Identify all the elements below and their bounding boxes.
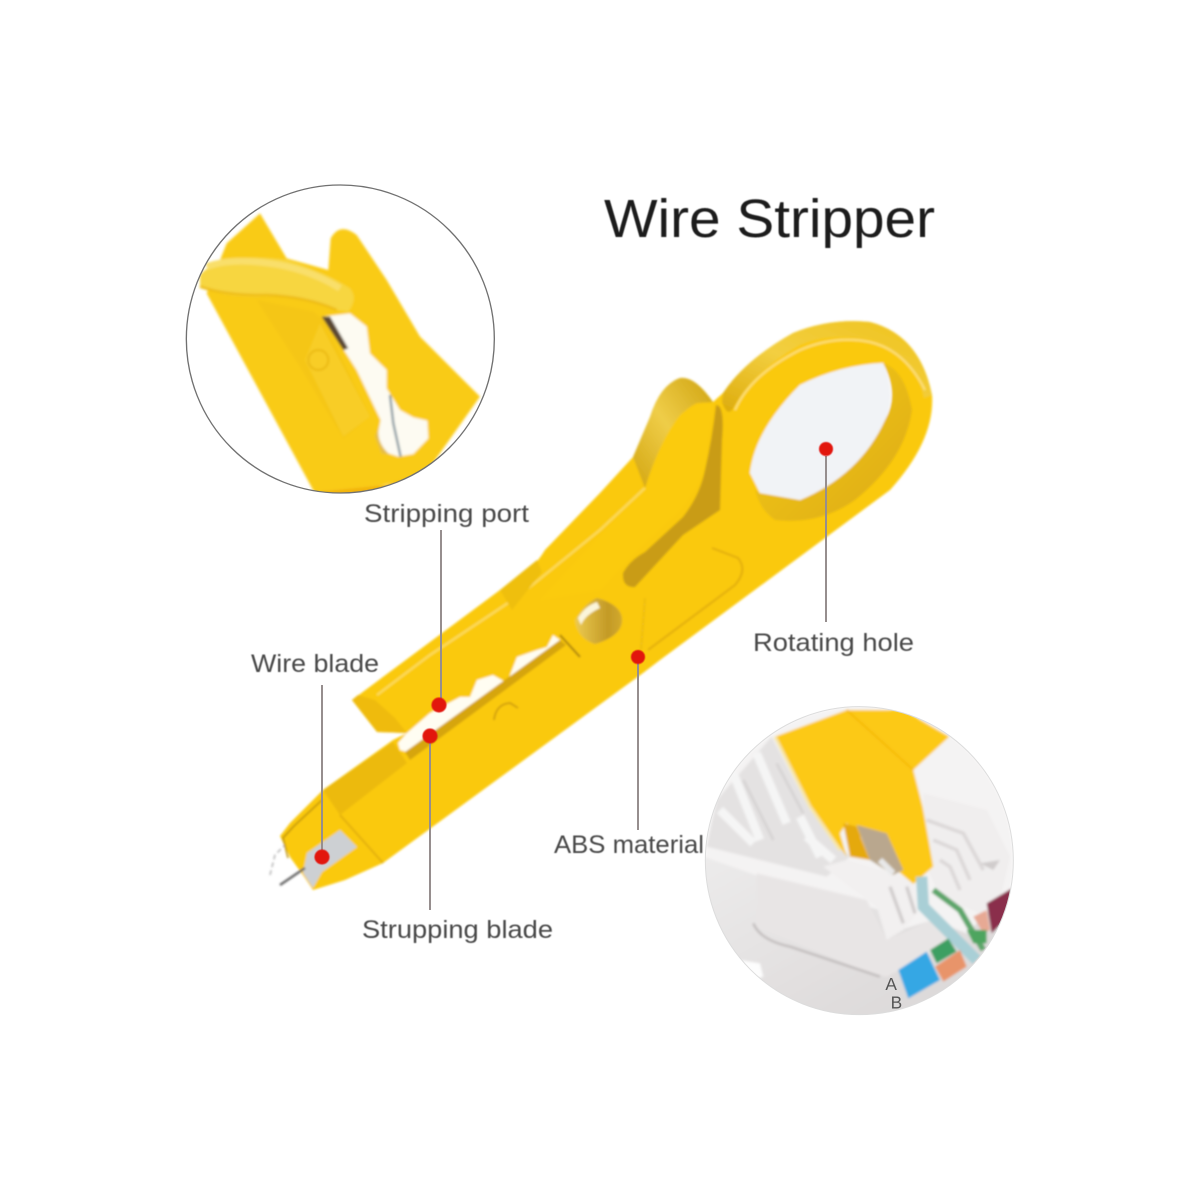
long slot [623,405,723,587]
gold slit lower edge [405,640,566,760]
leader lines [322,456,826,910]
slit [323,313,428,457]
rotating hole [750,363,891,500]
ring outer rim [722,321,932,412]
raised slider [305,323,370,437]
ring highlight line [735,340,925,410]
hook top face [540,403,713,600]
blade in tool [857,825,903,875]
wire in slit [390,395,401,457]
jaw fold shade [500,560,542,610]
shaded recessed panel [257,300,370,438]
bottom orange edge [323,478,403,492]
tool body in close-up [207,213,480,497]
hole shadow [374,431,388,456]
jack stepped ridges left [826,862,900,939]
label: wire blade: Wire blade [251,650,379,678]
title: Wire Stripper [604,189,935,249]
slider dimple [494,703,518,720]
panel: close-up of punching wires into jack [700,707,1020,1033]
stripping slit and teeth [398,635,560,752]
body fold [323,742,407,815]
clear modular plug [707,737,850,877]
panel: close-up of stripping a cable [186,185,494,500]
blade [303,830,357,888]
red marker dots [314,442,833,864]
jack stepped ridges right [923,793,1010,913]
label: stripping port: Stripping port [364,500,529,528]
yellow tool tip [775,710,949,884]
circle border [705,707,1013,1015]
terminal letters A and B [885,974,902,1012]
yellow cable [200,258,354,312]
dark blade edge [322,317,348,350]
jack front face [760,875,944,974]
circle border [186,185,494,493]
wires [922,877,977,960]
jaw tip bevel [352,695,407,733]
label: ABS material: ABS material [554,831,704,859]
hook side [633,378,713,488]
ring inner wall [755,363,912,521]
terminal letters A and B: A [885,974,897,994]
terminal letters A and B: B [891,992,902,1012]
label: rotating hole: Rotating hole [753,629,914,657]
main yellow wire stripper tool [270,321,932,890]
wire tips [280,868,305,885]
tool outline [280,321,932,890]
colour code labels [898,952,940,998]
slider outline [648,548,742,650]
thumb hole [575,598,622,644]
lower jack body [706,858,1009,1014]
label: strupping blade: Strupping blade [362,916,553,944]
